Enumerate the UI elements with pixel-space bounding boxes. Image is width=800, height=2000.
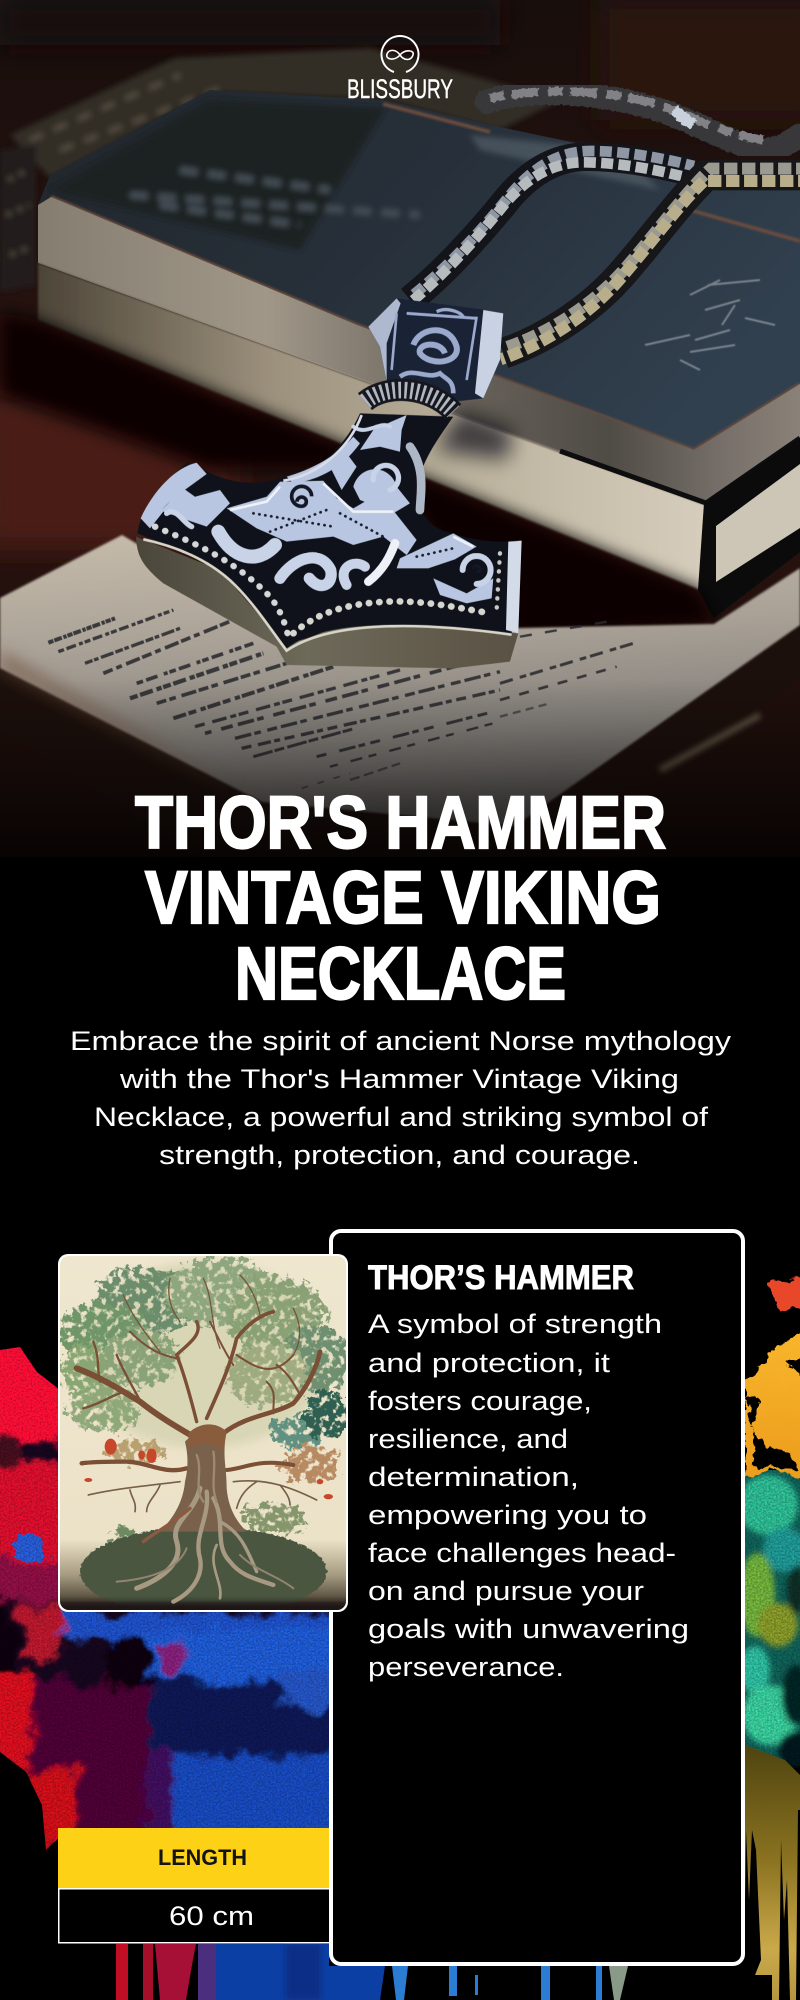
strand one [410,157,690,300]
upper closed book [0,90,800,640]
card body text: determination, [368,1462,579,1492]
info card [331,1231,743,1964]
card body text: and protection, it [368,1348,611,1378]
picture frame: watercolour tree of life [57,1254,353,1618]
book cover frame lines [51,104,800,450]
length value cell [59,1889,331,1943]
card body text: fosters courage, [368,1386,592,1416]
rear book and stone [0,48,560,292]
intro paragraph: with the Thor's Hammer Vintage Viking [119,1064,679,1094]
dot patterns [155,510,500,637]
blurred far chain [487,91,800,150]
spirals [292,486,480,572]
bale [368,298,503,402]
length spec table [58,1828,331,1943]
length spec table: LENGTH [158,1845,247,1870]
paint drips, bottom [116,1944,628,2000]
scratched cover lettering [645,280,775,370]
logo wordmark: BLISSBURY [347,74,453,104]
silver knotwork [141,415,522,633]
strand two [503,175,800,353]
foliage [60,1258,350,1548]
title: VINTAGE VIKING [145,856,661,939]
table surface [0,0,800,550]
card heading: THOR’S HAMMER [368,1259,634,1297]
trunk [160,1434,247,1532]
logo ring [382,36,418,72]
cover rim [38,197,800,505]
bright highlights [230,483,473,547]
intro paragraph: Embrace the spirit of ancient Norse mythology [70,1026,732,1056]
rope collar [365,390,453,412]
chain [407,91,800,359]
title: NECKLACE [235,932,566,1015]
shadow under the book [0,312,716,640]
intro paragraph: Necklace, a powerful and striking symbol of [94,1102,709,1132]
mound [79,1528,328,1602]
card body text: on and pursue your [368,1576,644,1606]
printed text lines [48,610,633,788]
title [135,781,666,1015]
face edge highlights [143,539,512,651]
right book corner [698,438,800,618]
bottom fade [0,680,800,857]
hero photo: necklace on old books [0,0,800,857]
card body text: empowering you to [368,1500,647,1530]
soft foliage wash [77,1262,330,1448]
title: THOR'S HAMMER [135,781,666,864]
card body text: face challenges head- [368,1538,676,1568]
card body text: goals with unwavering [368,1614,689,1644]
pendant face [137,413,520,648]
intro paragraph: strength, protection, and courage. [159,1140,640,1170]
pendant underside [136,537,518,668]
roots [117,1452,293,1602]
length header [58,1828,330,1888]
card body text: perseverance. [368,1652,564,1682]
length spec table: 60 cm [169,1901,254,1931]
paint splash: red and blue, left [0,1347,329,1850]
card body text: A symbol of strength [368,1309,662,1339]
card body text: resilience, and [368,1424,568,1454]
open book page [0,535,800,857]
card body text [368,1309,689,1682]
brand logo [347,36,453,104]
paint splash: multicolour, right [745,1276,800,2000]
page block [38,263,706,590]
Thor's hammer pendant [136,298,522,668]
intro paragraph [70,1026,732,1170]
branches [77,1275,320,1512]
pendant shadow [437,410,513,460]
